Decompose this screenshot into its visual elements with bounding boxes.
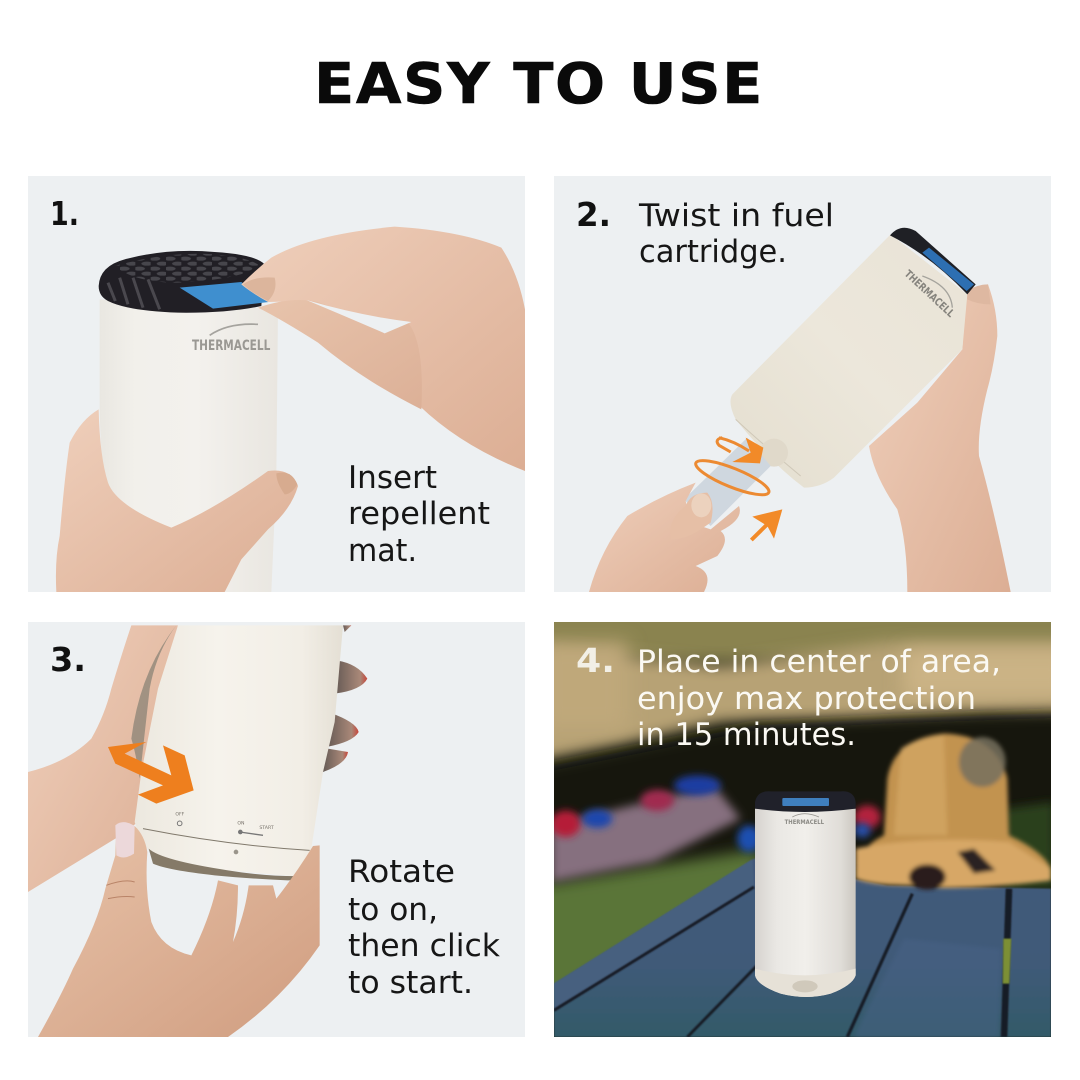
fuel cartridge xyxy=(684,438,771,526)
table planks xyxy=(554,859,1051,1037)
step 1 caption: repellent xyxy=(348,496,490,532)
step 2 caption: Twist in fuel xyxy=(638,198,834,234)
panel: step 1 xyxy=(28,176,525,592)
step 2 caption xyxy=(638,202,831,268)
upright device: START xyxy=(259,825,274,831)
step 4 caption xyxy=(638,648,998,746)
upright device: ON xyxy=(237,821,245,827)
blurred straw hat xyxy=(856,734,1051,890)
upright device: OFF xyxy=(175,812,185,818)
step 3 caption: to start. xyxy=(348,965,473,1001)
tilted device xyxy=(730,228,976,488)
step 1 number: 1. xyxy=(50,194,79,233)
device: unit with lid and logo: THERMACELL xyxy=(192,338,270,354)
panel: step 4 photo xyxy=(554,622,1051,1037)
device: unit with lid and logo xyxy=(99,251,278,592)
step 2 number: 2. xyxy=(576,195,611,234)
title: EASY TO USE xyxy=(314,52,764,117)
orange rotation arrows xyxy=(692,438,782,540)
step 4 number: 4. xyxy=(576,641,615,680)
step 4 caption: in 15 minutes. xyxy=(637,717,856,753)
device on table xyxy=(755,791,856,997)
tilted device: THERMACELL xyxy=(902,267,957,320)
step 4 caption: Place in center of area, xyxy=(637,644,1001,680)
lower hand xyxy=(38,825,320,1037)
step 1 caption xyxy=(350,465,490,562)
hand holding cartridge xyxy=(589,483,740,592)
upper hand behind device xyxy=(28,625,178,892)
orange rotate arrow xyxy=(108,742,194,804)
step 3 caption: then click xyxy=(348,928,500,964)
device on table: THERMACELL xyxy=(785,819,824,826)
step 3 caption xyxy=(348,854,500,1001)
panel: step 3 xyxy=(28,622,525,1037)
repellent mat xyxy=(180,282,269,309)
hand: lower left xyxy=(56,409,298,592)
step 3 caption: to on, xyxy=(348,892,438,928)
blurred background garden xyxy=(554,622,1051,1010)
fingernail xyxy=(115,822,135,857)
fingers behind device xyxy=(323,625,367,772)
step 4 caption: enjoy max protection xyxy=(637,681,976,717)
step 1 caption: mat. xyxy=(348,533,417,569)
upright device xyxy=(135,625,343,880)
step 3 number: 3. xyxy=(50,640,86,679)
step 1 caption: Insert xyxy=(348,460,437,496)
hand: top right xyxy=(241,227,525,471)
step 2 caption: cartridge. xyxy=(639,234,787,270)
step 3 caption: Rotate xyxy=(348,854,455,890)
panel: step 2 xyxy=(554,176,1051,592)
hand holding device xyxy=(869,284,1011,592)
